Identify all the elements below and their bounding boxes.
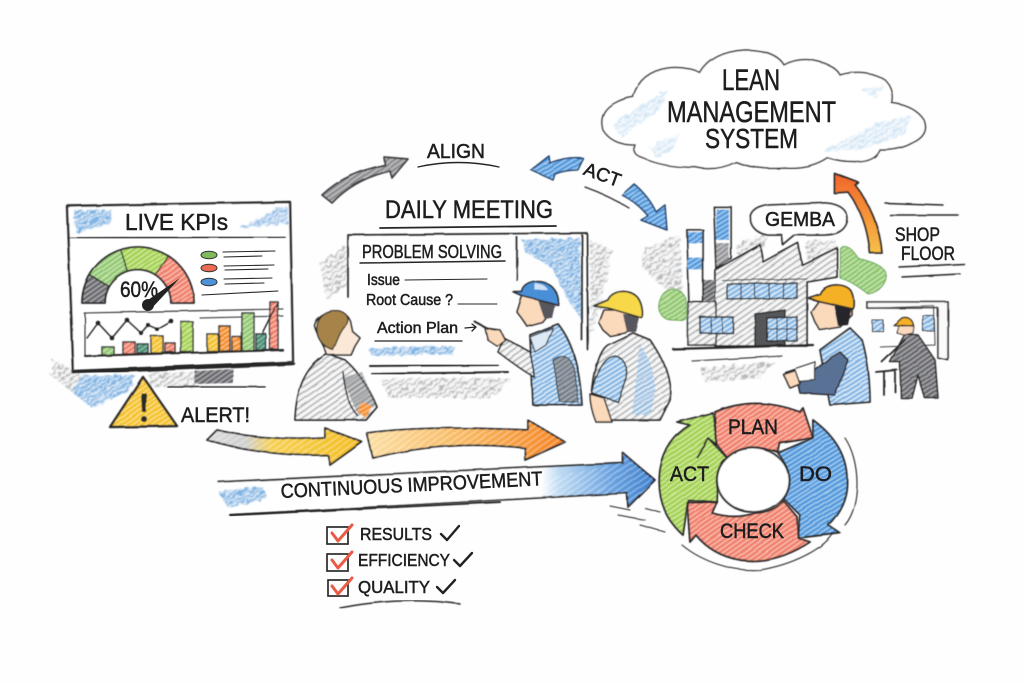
- monitor header shading: [74, 207, 288, 233]
- segment: check: [687, 500, 810, 561]
- label: align: [418, 141, 499, 167]
- segment: act: [659, 413, 727, 535]
- segment: plan: [715, 404, 813, 458]
- factory building: [673, 207, 837, 361]
- board text: action plan: Action Plan: [377, 320, 458, 337]
- checklist: [327, 524, 472, 608]
- segment: check: CHECK: [720, 520, 784, 543]
- supervisor with clipboard: [783, 285, 870, 405]
- cloud shape: [602, 50, 926, 169]
- heading: daily meeting: DAILY MEETING: [385, 196, 553, 224]
- panel: daily meeting board: [320, 196, 612, 398]
- arrow: meeting orange: [367, 420, 565, 460]
- person: presenter in blue hard hat: [475, 282, 582, 405]
- board frame: [348, 233, 588, 350]
- item: quality: [328, 577, 455, 597]
- speech bubble: gemba: [751, 203, 847, 245]
- label: act: ACT: [581, 159, 624, 192]
- label: shop floor: FLOOR: [901, 244, 955, 265]
- segment: act: ACT: [670, 463, 709, 486]
- panel: gemba factory scene: [640, 203, 964, 405]
- tree left: [659, 289, 687, 320]
- board blue highlight: [368, 346, 455, 356]
- arrow: gemba up to lean cloud: [834, 173, 882, 253]
- item: results: [327, 524, 459, 544]
- arrow: alert yellow: [207, 428, 362, 465]
- tree right: [840, 246, 886, 294]
- bar and line chart: [84, 302, 283, 356]
- board text: issue: [367, 272, 487, 289]
- monitor frame: [67, 202, 293, 372]
- board title: problem solving: PROBLEM SOLVING: [362, 242, 502, 262]
- board text: action plan: [375, 320, 476, 341]
- cloud heading: [667, 64, 836, 154]
- board shading: [320, 238, 612, 398]
- item: efficiency: EFFICIENCY: [358, 550, 450, 570]
- panel: PDCA cycle: [610, 404, 857, 570]
- label: shop floor: [885, 203, 964, 277]
- heading: live KPIs: LIVE KPIs: [125, 209, 228, 235]
- wheel motion lines: [610, 438, 857, 570]
- wheel hub: [717, 448, 789, 512]
- gauge value: 60%: [120, 277, 158, 302]
- arrow: align: [322, 157, 408, 203]
- panel: lean management system cloud: [602, 50, 926, 169]
- cloud blue shading left: [612, 90, 680, 158]
- gauge needle: [142, 278, 180, 311]
- label: align: ALIGN: [427, 141, 485, 163]
- board text: root cause: Root Cause ?: [366, 292, 453, 309]
- cloud heading: MANAGEMENT: [667, 96, 836, 129]
- item: efficiency: [327, 550, 472, 571]
- gauge legend: [201, 251, 278, 295]
- speech bubble: gemba: GEMBA: [765, 209, 836, 231]
- item: results: RESULTS: [360, 524, 432, 544]
- item: quality: QUALITY: [358, 577, 430, 597]
- cloud heading: SYSTEM: [705, 123, 798, 154]
- monitor bottom bezel: [75, 363, 293, 372]
- person: listener with brown hair: [295, 311, 377, 420]
- factory shading: [640, 232, 838, 382]
- person: worker in yellow hard hat: [590, 291, 670, 422]
- label: alert: ALERT!: [181, 404, 250, 427]
- label: shop floor: SHOP: [895, 225, 940, 246]
- cloud blue shading right: [820, 84, 912, 152]
- banner arrow: continuous improvement: [218, 453, 655, 515]
- cloud heading: LEAN: [722, 64, 780, 97]
- banner arrow: continuous improvement: CONTINUOUS IMPROVEMENT: [280, 468, 543, 503]
- far worker at workstation: [867, 302, 948, 398]
- icon: warning triangle: [110, 377, 177, 427]
- segment: plan: PLAN: [728, 416, 778, 439]
- monitor shading: [50, 360, 195, 408]
- board lines: [370, 365, 508, 374]
- monitor stand: [168, 369, 265, 387]
- panel: live KPI monitor: [50, 202, 293, 408]
- segment: do: [778, 420, 847, 538]
- gauge: [82, 247, 194, 303]
- segment: do: DO: [799, 463, 832, 486]
- arrow: act two-way: [531, 156, 667, 230]
- board text: issue: Issue: [367, 272, 400, 289]
